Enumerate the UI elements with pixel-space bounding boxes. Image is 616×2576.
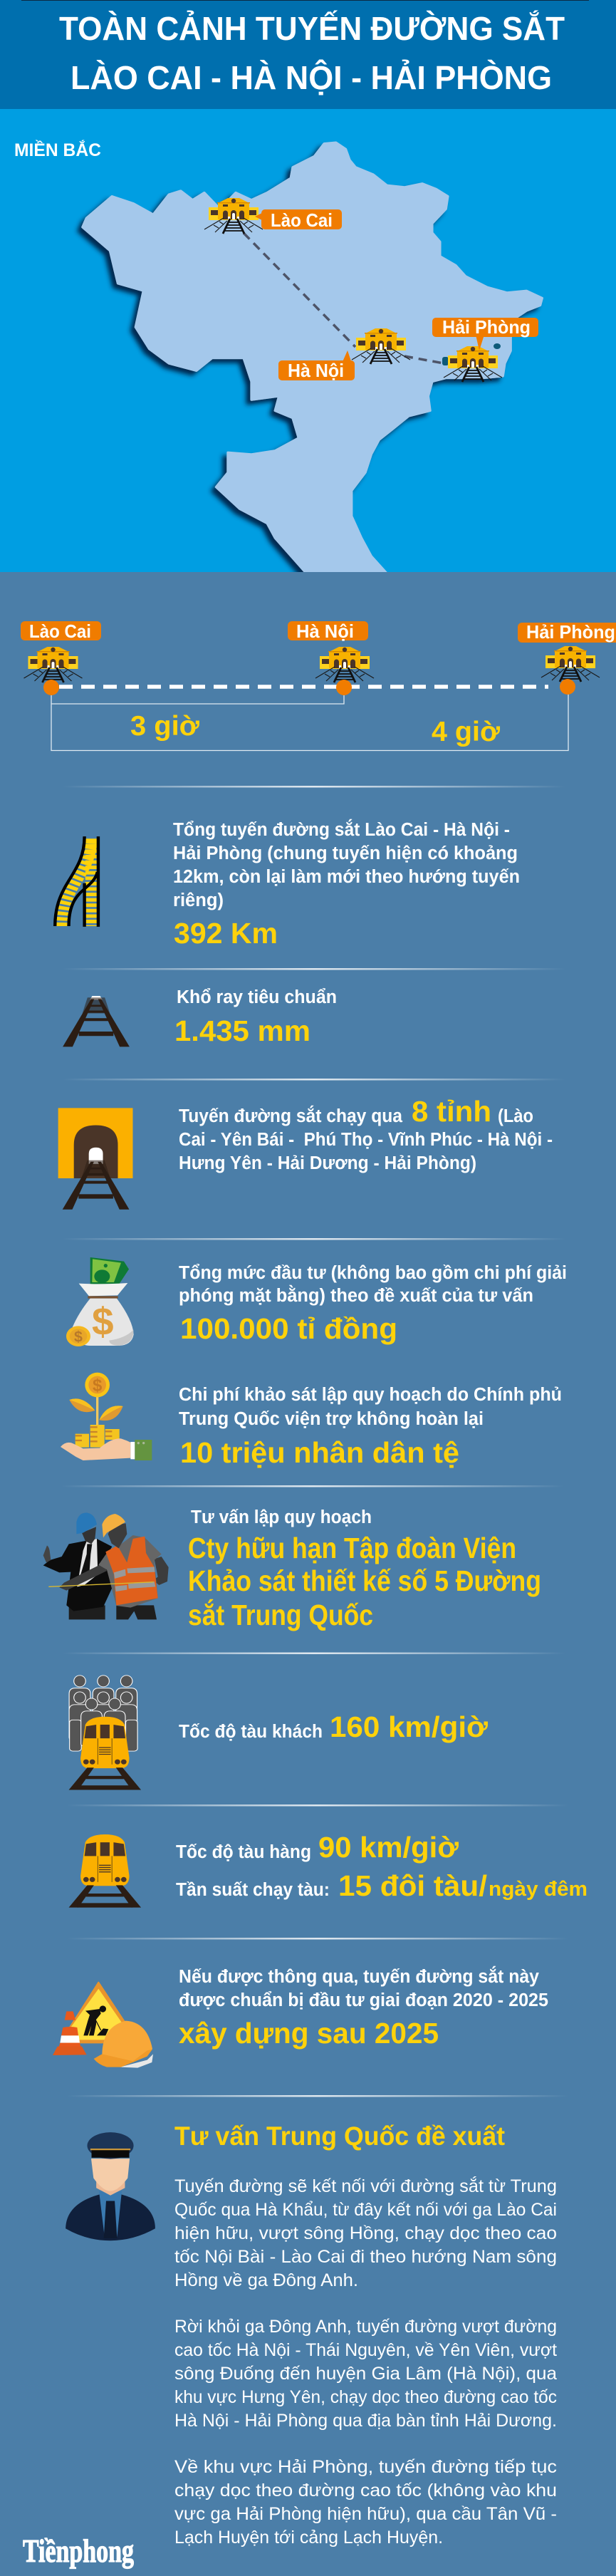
text: Nếu được thông qua, tuyến đường sắt này xyxy=(179,1965,540,1987)
bracket lines xyxy=(51,690,568,751)
paragraph 1: tốc Nội Bài - Lào Cai đi theo hướng Nam sông xyxy=(174,2247,557,2267)
icon: rail track xyxy=(63,996,130,1046)
value: company name: sắt Trung Quốc xyxy=(188,1599,373,1631)
icon: station Hải Phòng xyxy=(444,346,502,382)
dashed rail line xyxy=(59,685,548,689)
value: 392 Km: 392 Km xyxy=(174,917,278,950)
paragraph 3 xyxy=(174,2457,557,2548)
label: Miền Bắc: MIỀN BẮC xyxy=(14,139,101,160)
value: 15 pairs: 15 đôi tàu/ xyxy=(338,1869,487,1902)
paragraph 1: hiện hữu, vượt sông Hồng, chạy dọc theo cao xyxy=(174,2223,557,2243)
label: 3 hours: 3 giờ xyxy=(130,711,199,742)
icon: two engineers xyxy=(43,1512,169,1619)
icon: splitting rails xyxy=(55,836,98,927)
text: Tổng tuyến đường sắt Lào Cai - Hà Nội - xyxy=(173,819,510,840)
icon: money bag: $ xyxy=(92,1299,114,1344)
value: 10 triệu nhân dân tệ: 10 triệu nhân dân tệ xyxy=(180,1436,459,1469)
callout: Hà Nội xyxy=(278,350,355,381)
text: Tư vấn lập quy hoạch xyxy=(191,1507,372,1527)
panel: total investment: phóng mặt bằng) theo đề xuất của tư vấn xyxy=(179,1284,533,1306)
paragraph 1 xyxy=(174,2176,557,2290)
callout: Hà Nội: Hà Nội xyxy=(288,360,344,381)
text: Khổ ray tiêu chuẩn xyxy=(177,987,337,1007)
panel: total length: Hải Phòng (chung tuyến hiện có khoảng xyxy=(173,843,518,863)
text: frequency: Tần suất chạy tàu: xyxy=(176,1880,330,1900)
panel: provinces: (Lào xyxy=(498,1106,533,1126)
map: route dashed line xyxy=(244,233,444,363)
icon: station Lào Cai xyxy=(204,198,263,234)
paragraph 2: khu vực Hưng Yên, chạy dọc theo đường cao tốc xyxy=(174,2387,557,2407)
panel: schedule xyxy=(53,1965,548,2068)
text: Tuyến đường sắt chạy qua xyxy=(179,1105,403,1126)
paragraph 2: Hà Nội - Hải Phòng qua địa bàn tỉnh Hải Dương. xyxy=(174,2411,557,2431)
panel: provinces: Hưng Yên - Hải Dương - Hải Phòng) xyxy=(179,1153,476,1173)
paragraph 3: vực ga Hải Phòng hiện hữu), qua cầu Tân Vũ - xyxy=(174,2504,557,2524)
panel: survey cost: Trung Quốc viện trợ không hoàn lại xyxy=(179,1409,484,1429)
paragraph 3: Lạch Huyện tới cảng Lạch Huyện. xyxy=(174,2528,443,2548)
icon: coin plant in hand: $ xyxy=(93,1376,102,1396)
icon: construction sign, cone and helmet xyxy=(53,1983,153,2068)
panel: freight speed xyxy=(69,1831,588,1908)
paragraph 1: Tuyến đường sẽ kết nối với đường sắt từ Trung xyxy=(174,2176,557,2196)
map: islands near Hai Phong xyxy=(442,343,501,365)
text: Tốc độ tàu khách xyxy=(179,1722,323,1742)
paragraph 3: chạy dọc theo đường cao tốc (không vào khu xyxy=(174,2481,557,2500)
callout: Hải Phòng xyxy=(432,316,538,350)
paragraph 2: Rời khỏi ga Đông Anh, tuyến đường vượt đường xyxy=(174,2317,557,2337)
paragraph 2: sông Đuống đến huyện Gia Lâm (Hà Nội), qua xyxy=(174,2364,557,2384)
value: company name: Khảo sát thiết kế số 5 Đường xyxy=(188,1564,541,1597)
panel: schedule: được chuẩn bị đầu tư giai đoạn 2020 - 2025 xyxy=(179,1990,548,2010)
value: 90 km/giờ: 90 km/giờ xyxy=(318,1831,459,1864)
panel: travel time strip xyxy=(21,620,616,751)
value: company name: Cty hữu hạn Tập đoàn Viện xyxy=(188,1532,516,1564)
panel: gauge xyxy=(63,987,337,1047)
stop: Hải Phòng xyxy=(518,621,616,695)
panel: total investment xyxy=(66,1257,567,1346)
panel: total length: riêng) xyxy=(173,890,224,910)
label: 4 hours: 4 giờ xyxy=(432,717,500,747)
callout: Hải Phòng: Hải Phòng xyxy=(442,316,531,338)
title line 2: LÀO CAI - HÀ NỘI - HẢI PHÒNG xyxy=(71,59,552,96)
icon: tunnel xyxy=(58,1108,132,1210)
panel: provinces: Cai - Yên Bái - Phú Thọ - Vĩnh Phúc - Hà Nội - xyxy=(179,1130,553,1150)
text: Tốc độ tàu hàng xyxy=(176,1842,311,1862)
paragraph 1: Hồng về ga Đông Anh. xyxy=(174,2270,358,2290)
stop: Hải Phòng: Hải Phòng xyxy=(526,621,615,643)
icon: officer xyxy=(66,2132,155,2240)
heading: Tư vấn Trung Quốc đề xuất xyxy=(174,2121,505,2151)
icon: money bag: $ xyxy=(74,1328,83,1345)
callout: Lào Cai: Lào Cai xyxy=(271,209,333,231)
panel: provinces: 8 tỉnh xyxy=(412,1095,491,1128)
stop: Lào Cai: Lào Cai xyxy=(29,620,91,642)
icon: station Hà Nội xyxy=(352,328,410,364)
value: 160 km/giờ: 160 km/giờ xyxy=(330,1710,489,1743)
icon: train xyxy=(69,1834,141,1908)
panel: passenger speed xyxy=(69,1676,489,1790)
panel: provinces xyxy=(58,1095,553,1210)
value: 100.000 tỉ đồng: 100.000 tỉ đồng xyxy=(180,1312,397,1345)
paragraph 3: Về khu vực Hải Phòng, tuyến đường tiếp tục xyxy=(174,2457,557,2477)
value: company name xyxy=(188,1532,541,1631)
text: Tổng mức đầu tư (không bao gồm chi phí giải xyxy=(179,1263,567,1283)
icon: money bag xyxy=(66,1257,134,1346)
panel: consultant xyxy=(43,1507,541,1631)
logo: Tiền Phong: Tiềnphong xyxy=(23,2533,134,2569)
text: Chi phí khảo sát lập quy hoạch do Chính phủ xyxy=(179,1385,562,1405)
panel: Chinese consultant proposal xyxy=(66,2121,557,2548)
panel: survey cost xyxy=(61,1373,562,1469)
value: after 2025: xây dựng sau 2025 xyxy=(179,2017,439,2050)
value: 1.435 mm: 1.435 mm xyxy=(174,1014,310,1047)
panel: total length: 12km, còn lại làm mới theo hướng tuyến xyxy=(173,867,520,887)
stop: Lào Cai xyxy=(21,620,101,695)
stop: Hà Nội: Hà Nội xyxy=(296,620,354,642)
panel: map xyxy=(0,109,616,578)
paragraph 1: Quốc qua Hà Khẩu, từ đây kết nối với ga Lào Cai xyxy=(174,2200,557,2220)
value: per day: ngày đêm xyxy=(489,1878,588,1901)
stop: Hà Nội xyxy=(288,620,374,695)
paragraph 2: cao tốc Hà Nội - Thái Nguyên, về Yên Viên, vượt xyxy=(174,2340,557,2360)
panel: title banner xyxy=(0,0,616,109)
panel: total length xyxy=(55,819,520,950)
map: northern Vietnam land xyxy=(83,142,542,578)
title line 1: TOÀN CẢNH TUYẾN ĐƯỜNG SẮT xyxy=(59,10,565,47)
icon: passengers and train xyxy=(69,1676,141,1790)
paragraph 2 xyxy=(174,2317,557,2431)
icon: coin plant in hand xyxy=(61,1373,152,1460)
